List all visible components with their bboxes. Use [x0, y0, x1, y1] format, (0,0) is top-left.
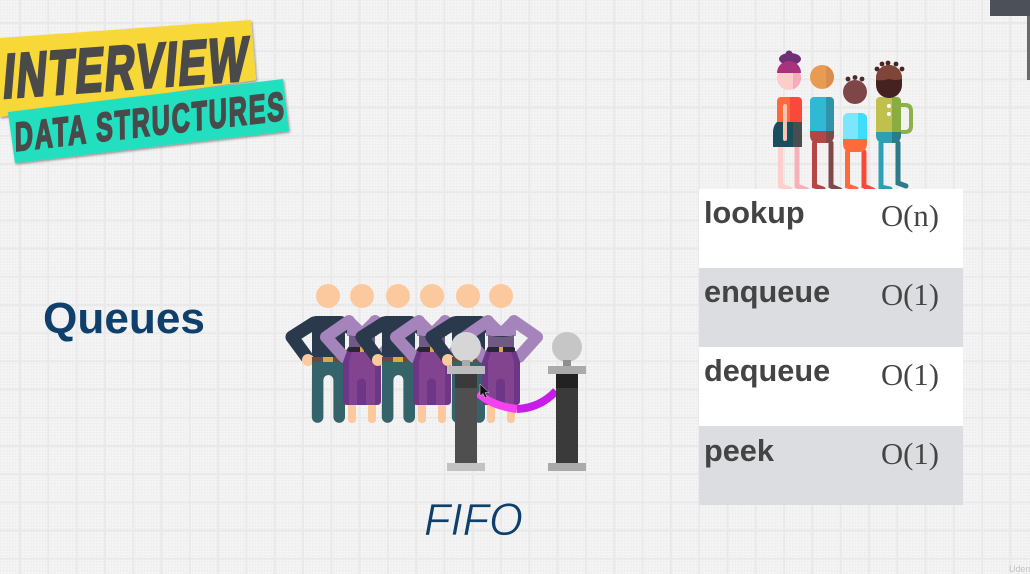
rope: [478, 391, 556, 409]
row: peek: [699, 426, 963, 505]
row: enqueue: [699, 268, 963, 347]
row: lookup: O(n): [881, 199, 939, 233]
icon: mouse cursor: [480, 384, 489, 398]
row: peek: peek: [704, 433, 775, 468]
row: lookup: lookup: [704, 195, 805, 230]
label: FIFO: FIFO: [424, 494, 523, 545]
illustration: people in line: [292, 284, 537, 423]
left post: [447, 332, 485, 471]
person 2: [810, 65, 840, 190]
complexity table: [699, 189, 963, 505]
row: enqueue: enqueue: [704, 274, 830, 309]
person 4: [875, 61, 911, 189]
person 3: [843, 75, 873, 190]
window tab top right: [990, 0, 1030, 16]
illustration: rope stanchions: [447, 332, 586, 471]
row: dequeue: O(1): [881, 358, 939, 392]
illustration: four standing people: [773, 50, 911, 190]
row: dequeue: [699, 347, 963, 426]
title banner: [0, 20, 289, 163]
row: lookup: [699, 189, 963, 268]
row: peek: O(1): [881, 437, 939, 471]
person 1: [773, 50, 807, 190]
row: dequeue: dequeue: [704, 353, 830, 388]
right post: [548, 332, 586, 471]
row: enqueue: O(1): [881, 278, 939, 312]
banner: data structures: DATA STRUCTURES: [15, 85, 286, 161]
scrollbar: [1027, 16, 1030, 80]
banner: interview: INTERVIEW: [1, 25, 252, 112]
heading: Queues: Queues: [43, 294, 205, 343]
